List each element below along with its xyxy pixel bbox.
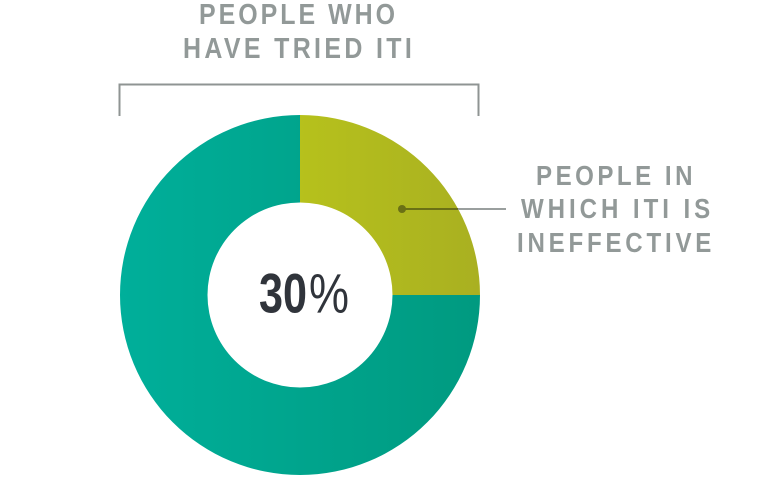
label: people in which ITI is ineffective: PEOPLE IN	[536, 159, 693, 191]
label: people in which ITI is ineffective: INEFFECTIVE	[517, 226, 711, 258]
center value: 30	[259, 262, 307, 324]
label: people in which ITI is ineffective	[517, 159, 711, 258]
donut segment: olive	[300, 115, 480, 295]
center value	[259, 262, 349, 324]
donut segment: teal	[120, 115, 480, 475]
bracket	[120, 84, 478, 116]
donut chart	[120, 115, 480, 475]
heading: people who have tried ITI	[183, 0, 412, 64]
label: people in which ITI is ineffective: WHICH ITI IS	[521, 192, 710, 224]
center value: %	[309, 262, 349, 324]
leader line	[398, 205, 506, 213]
heading: people who have tried ITI: HAVE TRIED ITI	[183, 32, 412, 64]
